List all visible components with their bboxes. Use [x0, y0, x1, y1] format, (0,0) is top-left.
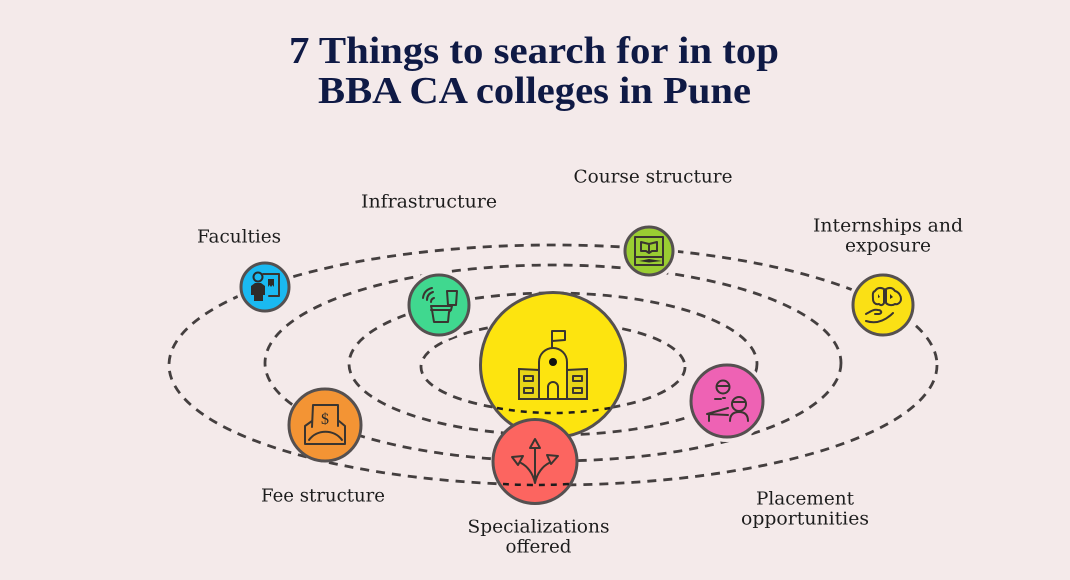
- label: faculties: Faculties: [197, 228, 281, 248]
- label: specializations offered: [468, 518, 610, 558]
- label: placement opportunities: opportunities: [741, 510, 869, 530]
- label: internships and exposure: [813, 216, 963, 256]
- orbit rings: [169, 245, 937, 485]
- icon: internships and exposure node: [848, 270, 918, 340]
- label: infrastructure: Infrastructure: [361, 192, 497, 212]
- label: specializations offered: offered: [506, 538, 572, 558]
- icon: course structure node: [620, 222, 678, 280]
- label: placement opportunities: Placement: [756, 490, 854, 510]
- icon: faculties node: [236, 258, 294, 316]
- label: placement opportunities: [741, 490, 869, 530]
- title: [289, 30, 779, 112]
- label: fee structure: Fee structure: [261, 486, 385, 506]
- orbit overlay across specializations node: [503, 484, 570, 485]
- icon: fee structure node: [289, 389, 361, 461]
- label: internships and exposure: Internships and: [813, 216, 963, 236]
- label: internships and exposure: exposure: [845, 236, 931, 256]
- icon: fee structure node: $: [321, 411, 329, 428]
- icon: infrastructure node: [404, 270, 474, 340]
- label: specializations offered: Specializations: [468, 518, 610, 538]
- icon: college building node: [480, 292, 626, 438]
- label: course structure: Course structure: [574, 168, 732, 188]
- orbit overlay across college node: [497, 408, 610, 413]
- title: 7 Things to search for in top: [289, 30, 779, 72]
- icon: specializations offered node: [493, 420, 577, 504]
- title: BBA CA colleges in Pune: [318, 70, 751, 112]
- icon: placement opportunities node: [686, 360, 768, 442]
